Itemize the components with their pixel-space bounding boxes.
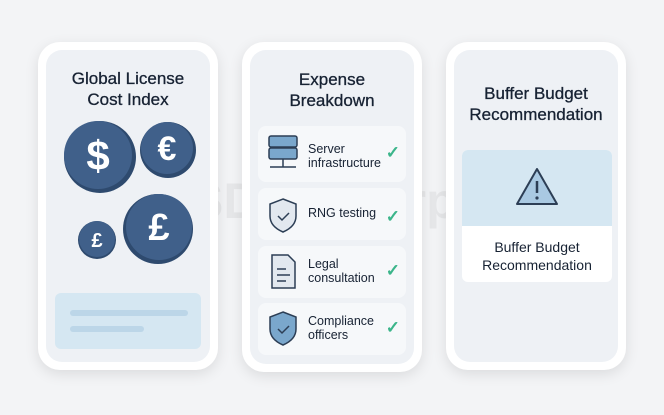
heading: Expense	[299, 70, 365, 89]
heading: Cost Index	[87, 90, 169, 109]
row: legal: ✓	[386, 261, 400, 280]
row: legal: consultation	[308, 271, 375, 285]
row: server: infrastructure	[308, 156, 381, 170]
row: compliance: officers	[308, 328, 348, 342]
row: server: ✓	[386, 143, 400, 162]
recommendation box: Buffer Budget	[494, 239, 580, 255]
panel: global license cost index	[38, 42, 218, 370]
row: legal	[258, 246, 406, 298]
recommendation box: Recommendation	[482, 257, 592, 273]
icon: coins: £	[91, 230, 103, 252]
row: server: Server	[308, 142, 345, 156]
row: rng	[258, 188, 406, 240]
recommendation box	[462, 150, 612, 282]
heading: Breakdown	[289, 91, 375, 110]
text placeholder box	[55, 293, 201, 349]
heading: Recommendation	[469, 105, 603, 124]
icon: coins	[64, 121, 196, 264]
heading: Global License	[72, 69, 184, 88]
panel: buffer budget	[446, 42, 626, 370]
heading	[72, 69, 184, 109]
row: server	[258, 126, 406, 182]
icon: coins: £	[148, 207, 170, 249]
panel: expense breakdown	[242, 42, 422, 372]
heading: Buffer Budget	[484, 84, 588, 103]
watermark: SDLC Corp	[190, 173, 457, 229]
row: rng: ✓	[386, 207, 400, 226]
heading	[289, 70, 375, 110]
row: compliance	[258, 303, 406, 355]
row: legal: Legal	[308, 257, 339, 271]
row: compliance: Compliance	[308, 314, 374, 328]
row: rng: RNG testing	[308, 206, 376, 220]
icon: coins: $	[86, 132, 110, 179]
row: compliance: ✓	[386, 318, 400, 337]
icon: coins: €	[158, 130, 177, 168]
heading	[469, 84, 603, 124]
icon: warning	[516, 168, 558, 205]
